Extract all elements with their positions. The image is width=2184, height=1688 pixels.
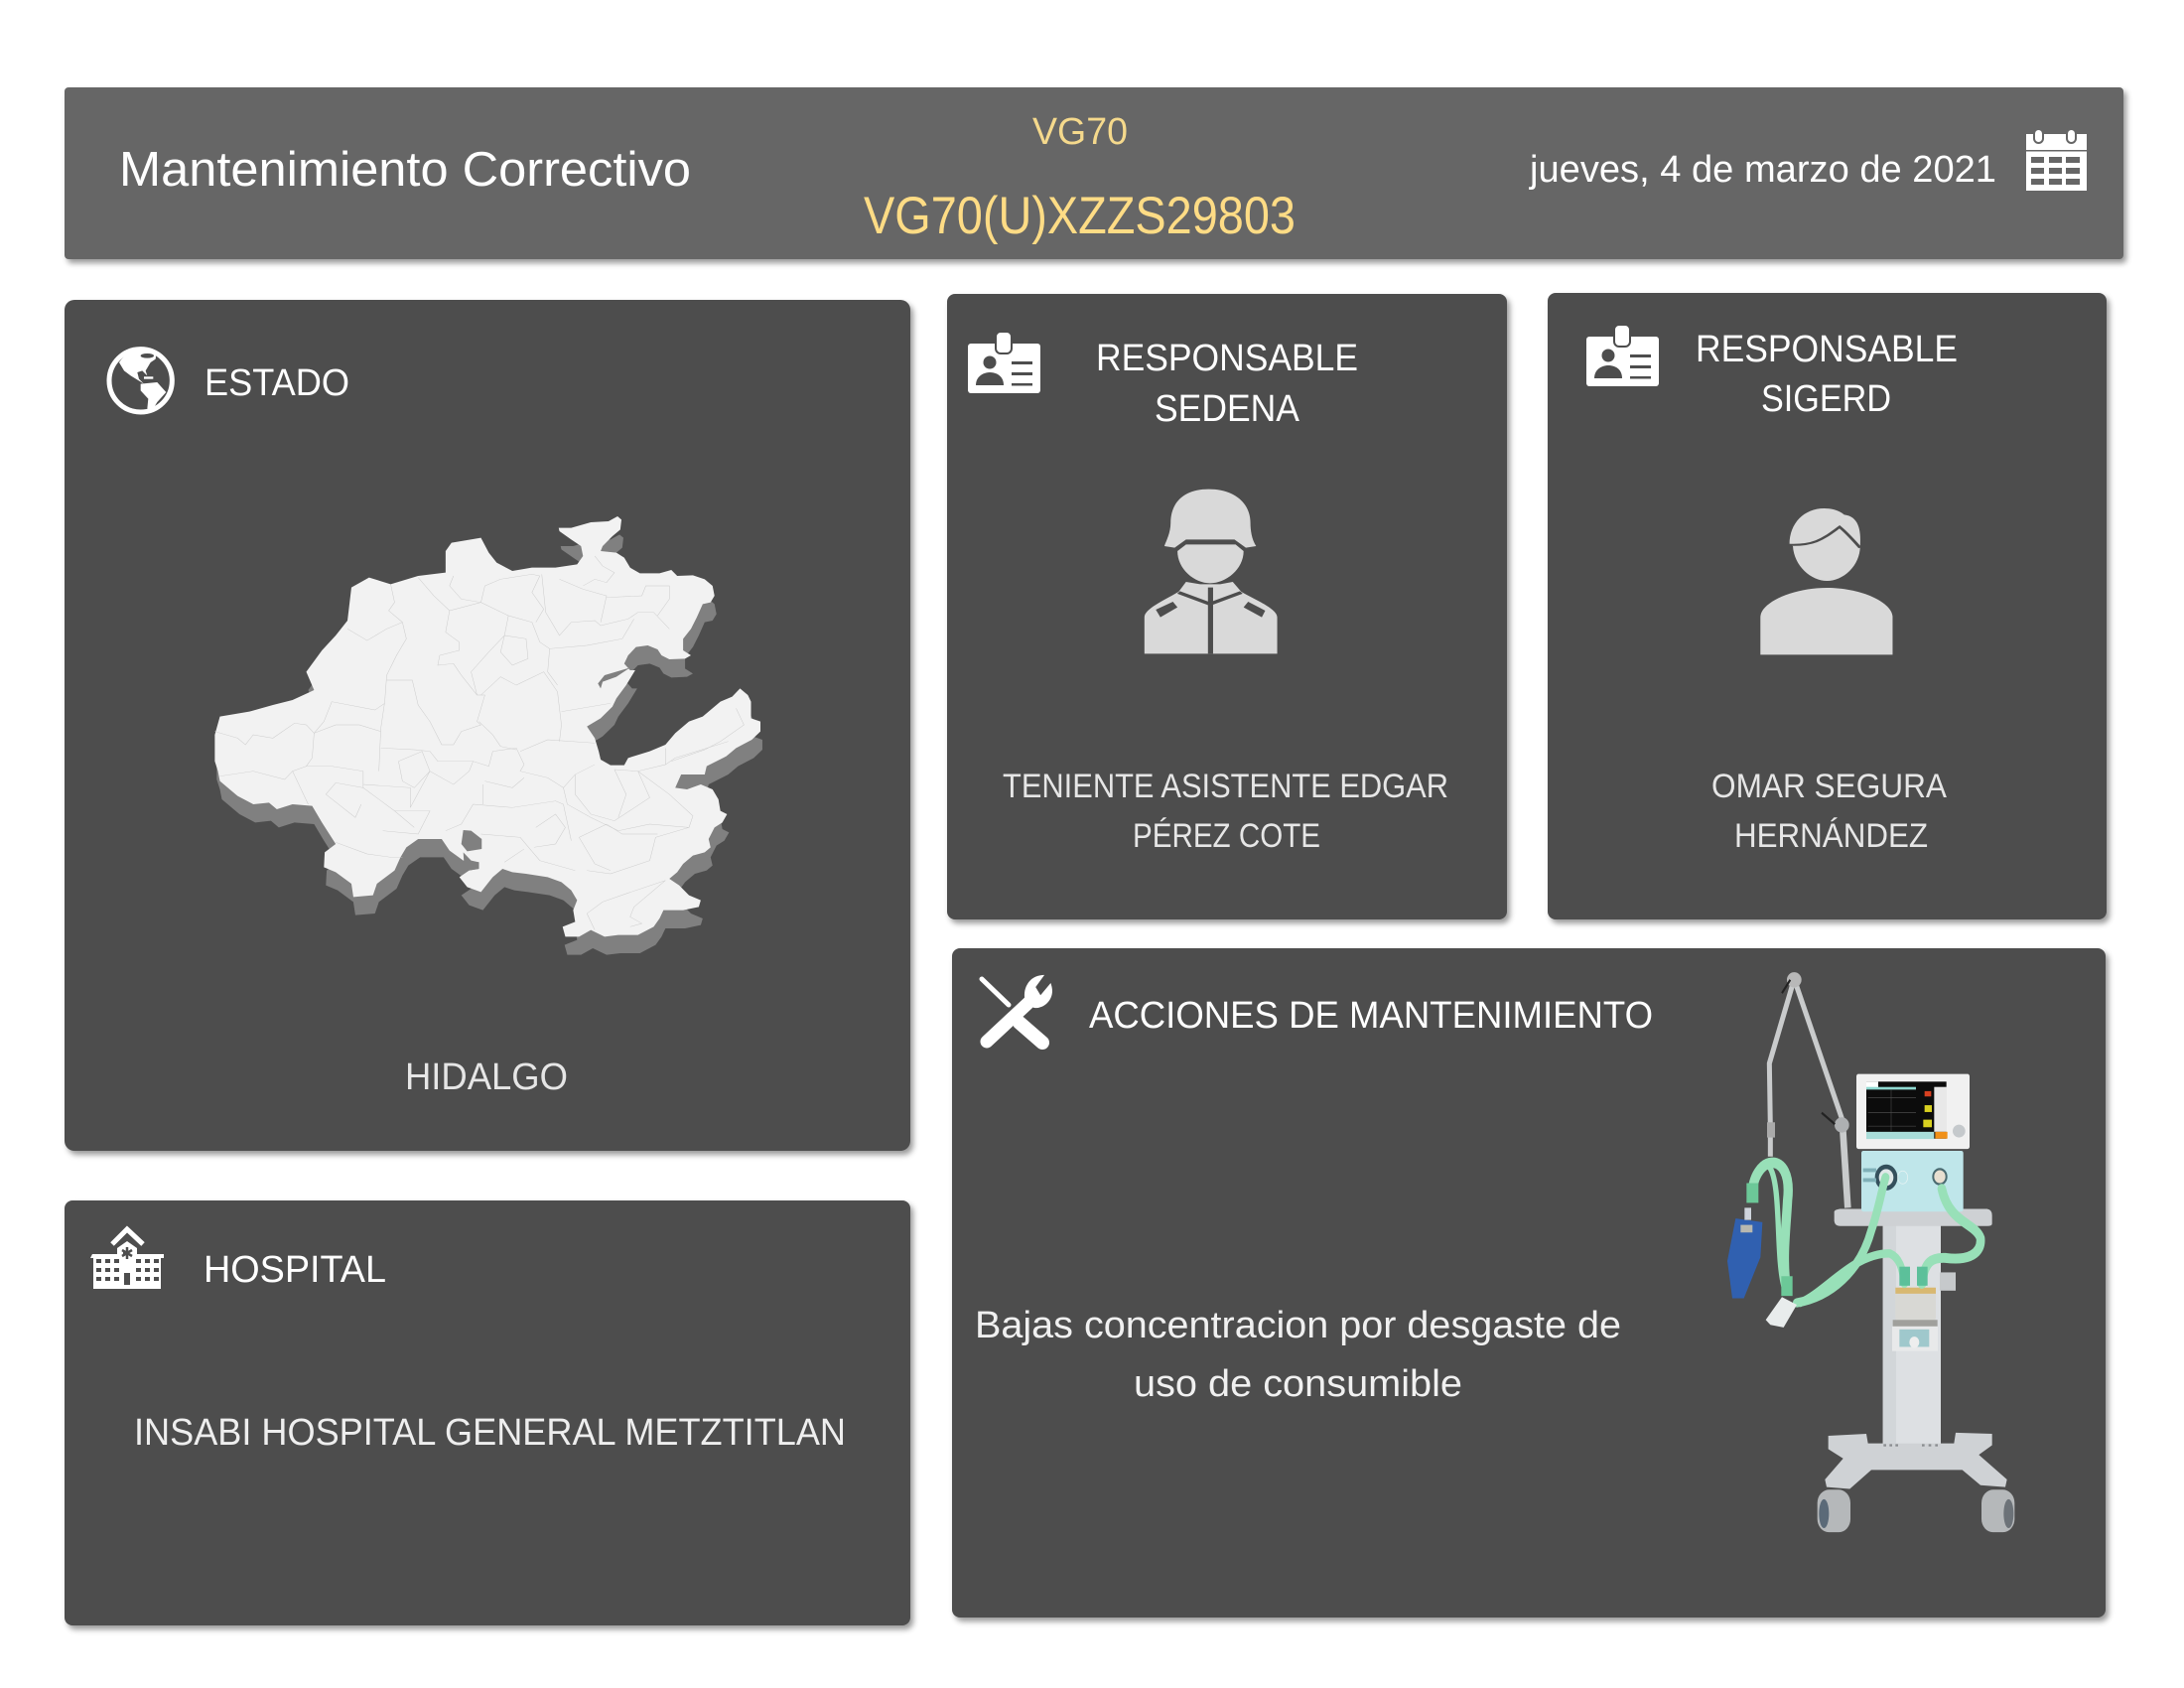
device model: VG70 <box>1032 111 1128 153</box>
unit <box>1861 1151 1964 1211</box>
monitor <box>1856 1074 1970 1149</box>
panel: hospital <box>65 1200 910 1625</box>
icon: tools <box>982 976 1051 1043</box>
label: state name: HIDALGO <box>405 1056 568 1098</box>
name: responsable sedena <box>1003 768 1448 855</box>
description text: Bajas concentracion por desgaste de <box>975 1305 1621 1346</box>
heading: hospital: HOSPITAL <box>204 1249 386 1291</box>
description text: uso de consumible <box>1134 1363 1462 1405</box>
name: responsable sedena: PÉREZ COTE <box>1133 817 1320 855</box>
icon: id badge <box>968 332 1040 393</box>
icon: person <box>1760 508 1892 654</box>
shelf <box>1835 1209 1992 1226</box>
name: responsable sedena: TENIENTE ASISTENTE EDGAR <box>1003 768 1448 805</box>
heading: responsable sigerd: RESPONSABLE <box>1696 329 1958 370</box>
column <box>1883 1225 1941 1446</box>
icon: soldier <box>1145 490 1278 653</box>
wheels <box>1818 1489 1850 1532</box>
description text <box>975 1305 1621 1405</box>
illustration: ventilator <box>1727 972 2015 1533</box>
heading: acciones de mantenimiento: ACCIONES DE MANTENIMIENTO <box>1089 995 1653 1037</box>
title: Mantenimiento Correctivo <box>119 143 691 197</box>
arm <box>1769 979 1847 1207</box>
heading: responsable sigerd <box>1696 329 1958 420</box>
heading: responsable sedena: RESPONSABLE <box>1096 338 1358 379</box>
tubes <box>1752 1163 1980 1303</box>
icon: hospital <box>90 1229 164 1289</box>
panel: responsable sedena <box>947 294 1507 919</box>
name: responsable sigerd: HERNÁNDEZ <box>1734 817 1928 855</box>
humidifier <box>1895 1288 1936 1320</box>
bag <box>1727 1218 1762 1298</box>
connector <box>1766 1297 1797 1328</box>
panel: acciones de mantenimiento <box>952 948 2106 1618</box>
name: responsable sigerd: OMAR SEGURA <box>1711 768 1947 805</box>
date: jueves, 4 de marzo de 2021 <box>1529 149 1996 191</box>
panel: estado <box>65 300 910 1151</box>
panel: header <box>65 87 2123 259</box>
heading: responsable sedena: SEDENA <box>1155 388 1300 430</box>
device serial number: VG70(U)XZZS29803 <box>864 187 1296 245</box>
panel: responsable sigerd <box>1548 293 2107 919</box>
heading: estado: ESTADO <box>205 362 349 404</box>
map: Hidalgo <box>214 516 762 955</box>
base <box>1825 1433 2007 1489</box>
icon: calendar <box>2026 129 2087 191</box>
icon: id badge <box>1586 325 1659 386</box>
hospital name: INSABI HOSPITAL GENERAL METZTITLAN <box>134 1412 846 1454</box>
icon: globe <box>109 349 172 412</box>
name: responsable sigerd <box>1711 768 1947 855</box>
heading: responsable sedena <box>1096 338 1358 430</box>
heading: responsable sigerd: SIGERD <box>1761 378 1891 420</box>
